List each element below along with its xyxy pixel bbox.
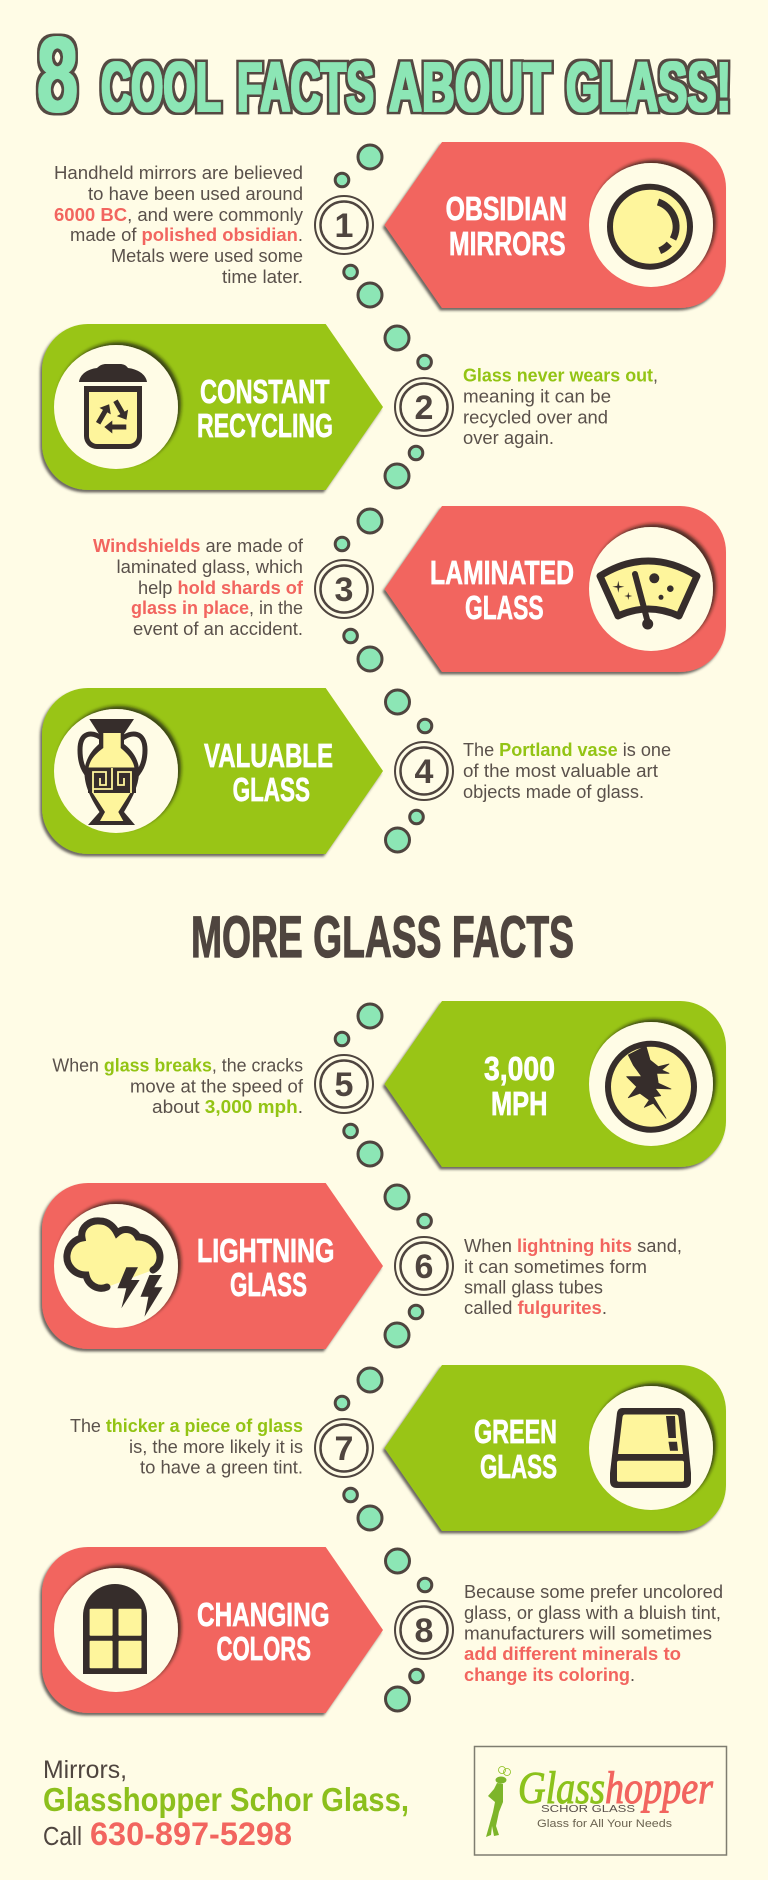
description text: called fulgurites. [464,1297,607,1318]
banner label: GLASS [230,1267,307,1304]
icon: cracked glass [589,1022,713,1146]
banner label [197,1597,330,1668]
description text: Windshields are made of [93,535,304,556]
description text [464,1581,723,1685]
logo box: Glass for All Your Needs [537,1818,673,1830]
title: FACTS [237,48,374,126]
title: COOL [101,48,221,126]
number badge 8 with bubbles: 8 [415,1612,433,1650]
icon: grasshopper [486,1766,510,1837]
description text: 6000 BC, and were commonly [54,204,304,225]
description text [70,1415,303,1478]
number badge 8 with bubbles [386,1549,453,1711]
banner label: RECYCLING [197,408,333,445]
description text [463,739,671,802]
banner [384,506,726,672]
number badge 3 with bubbles: 3 [335,571,353,609]
banner [42,688,383,854]
logo box: SCHOR GLASS [541,1803,635,1815]
icon: arched window [54,1568,178,1692]
number badge 1 with bubbles: 1 [335,207,353,245]
banner label: GLASS [465,590,544,627]
description text: Glass never wears out, [463,365,658,386]
banner label: MPH [491,1086,548,1123]
description text: laminated glass, which [116,556,303,577]
icon: windshield wiper [589,527,713,651]
description text: over again. [463,427,554,448]
banner label: COLORS [216,1631,311,1668]
description text: help hold shards of [138,577,304,598]
banner label [446,191,567,263]
number badge 4 with bubbles [386,690,453,852]
description text: add different minerals to [464,1643,681,1664]
description text: event of an accident. [133,618,303,639]
number badge 7 with bubbles [315,1368,382,1530]
fact 8: changing colors [42,1547,723,1713]
description text: Metals were used some [111,245,303,266]
banner label: GREEN [474,1414,557,1451]
description text [52,1055,304,1117]
fact 3: laminated glass [93,506,726,672]
description text: it can sometimes form [464,1256,647,1277]
banner label: GLASS [480,1449,557,1486]
description text: time later. [222,266,303,287]
banner label [430,555,574,627]
number badge 6 with bubbles [385,1185,453,1347]
fact 2: constant recycling [42,324,658,490]
banner label: CHANGING [197,1597,330,1634]
banner label: LAMINATED [430,555,574,592]
banner label: OBSIDIAN [446,191,567,228]
number badge 3 with bubbles [315,509,382,671]
banner [42,1547,383,1713]
description text: When lightning hits sand, [464,1235,682,1256]
banner label [197,374,333,445]
contact text: Glasshopper Schor Glass, [43,1781,409,1818]
banner [384,1365,726,1531]
banner [42,1183,383,1349]
fact 6: lightning glass [42,1183,682,1349]
description text: to have been used around [88,183,303,204]
banner [384,1001,726,1167]
banner label: 3,000 [484,1051,555,1088]
contact text [43,1756,409,1852]
description text: made of polished obsidian. [70,224,303,245]
description text: change its coloring. [464,1664,635,1685]
logo box: Glass [518,1762,605,1813]
description text: recycled over and [463,406,608,428]
fact 7: green glass [70,1365,726,1531]
description text: objects made of glass. [463,781,644,802]
description text [464,1235,682,1318]
fact 5: 3,000 mph [52,1001,726,1167]
description text: glass in place, in the [131,597,303,618]
banner label [484,1051,555,1123]
description text: The Portland vase is one [463,739,671,760]
number badge 5 with bubbles [315,1004,382,1166]
icon: vase [54,709,178,833]
description text: Because some prefer uncolored [464,1581,723,1602]
number badge 2 with bubbles: 2 [415,389,433,427]
description text: move at the speed of [130,1076,304,1097]
banner label [197,1233,334,1304]
title: 8 [37,16,78,134]
banner [42,324,383,490]
icon: recycling bin [54,345,178,469]
icon: mirror [589,163,713,287]
description text: to have a green tint. [140,1456,303,1478]
banner label: LIGHTNING [197,1233,334,1270]
number badge 1 with bubbles [315,145,382,307]
description text: small glass tubes [464,1276,603,1298]
description text [463,365,658,448]
title: ABOUT [389,48,551,126]
description text: manufacturers will sometimes [464,1622,712,1644]
icon: glass block [589,1386,713,1510]
logo box: hopper [605,1762,714,1813]
banner [384,142,726,308]
description text [93,535,304,639]
description text: about 3,000 mph. [152,1096,303,1117]
fact 1: obsidian mirrors [54,142,726,308]
contact text: 630-897-5298 [90,1816,292,1852]
contact text: Mirrors, [43,1756,127,1784]
banner label: CONSTANT [200,374,330,411]
number badge 4 with bubbles: 4 [415,753,434,791]
banner label [204,738,333,809]
description text: glass, or glass with a bluish tint, [464,1602,721,1623]
number badge 6 with bubbles: 6 [415,1248,433,1286]
icon: storm cloud [54,1204,178,1328]
banner label: MIRRORS [449,226,566,263]
contact text: Call [43,1821,82,1851]
description text: The thicker a piece of glass [70,1415,303,1436]
number badge 2 with bubbles [385,326,453,488]
banner label: VALUABLE [204,738,333,775]
fact 4: valuable glass [42,688,671,854]
description text: of the most valuable art [463,760,659,781]
description text: When glass breaks, the cracks [52,1055,303,1076]
description text: Handheld mirrors are believed [54,162,303,183]
number badge 7 with bubbles: 7 [335,1430,353,1468]
logo box [474,1746,726,1855]
description text: is, the more likely it is [129,1436,303,1457]
title [37,16,731,134]
description text: meaning it can be [463,386,611,407]
banner label [474,1414,557,1486]
description text [54,162,304,287]
banner label: GLASS [233,772,310,809]
number badge 5 with bubbles: 5 [335,1066,353,1104]
